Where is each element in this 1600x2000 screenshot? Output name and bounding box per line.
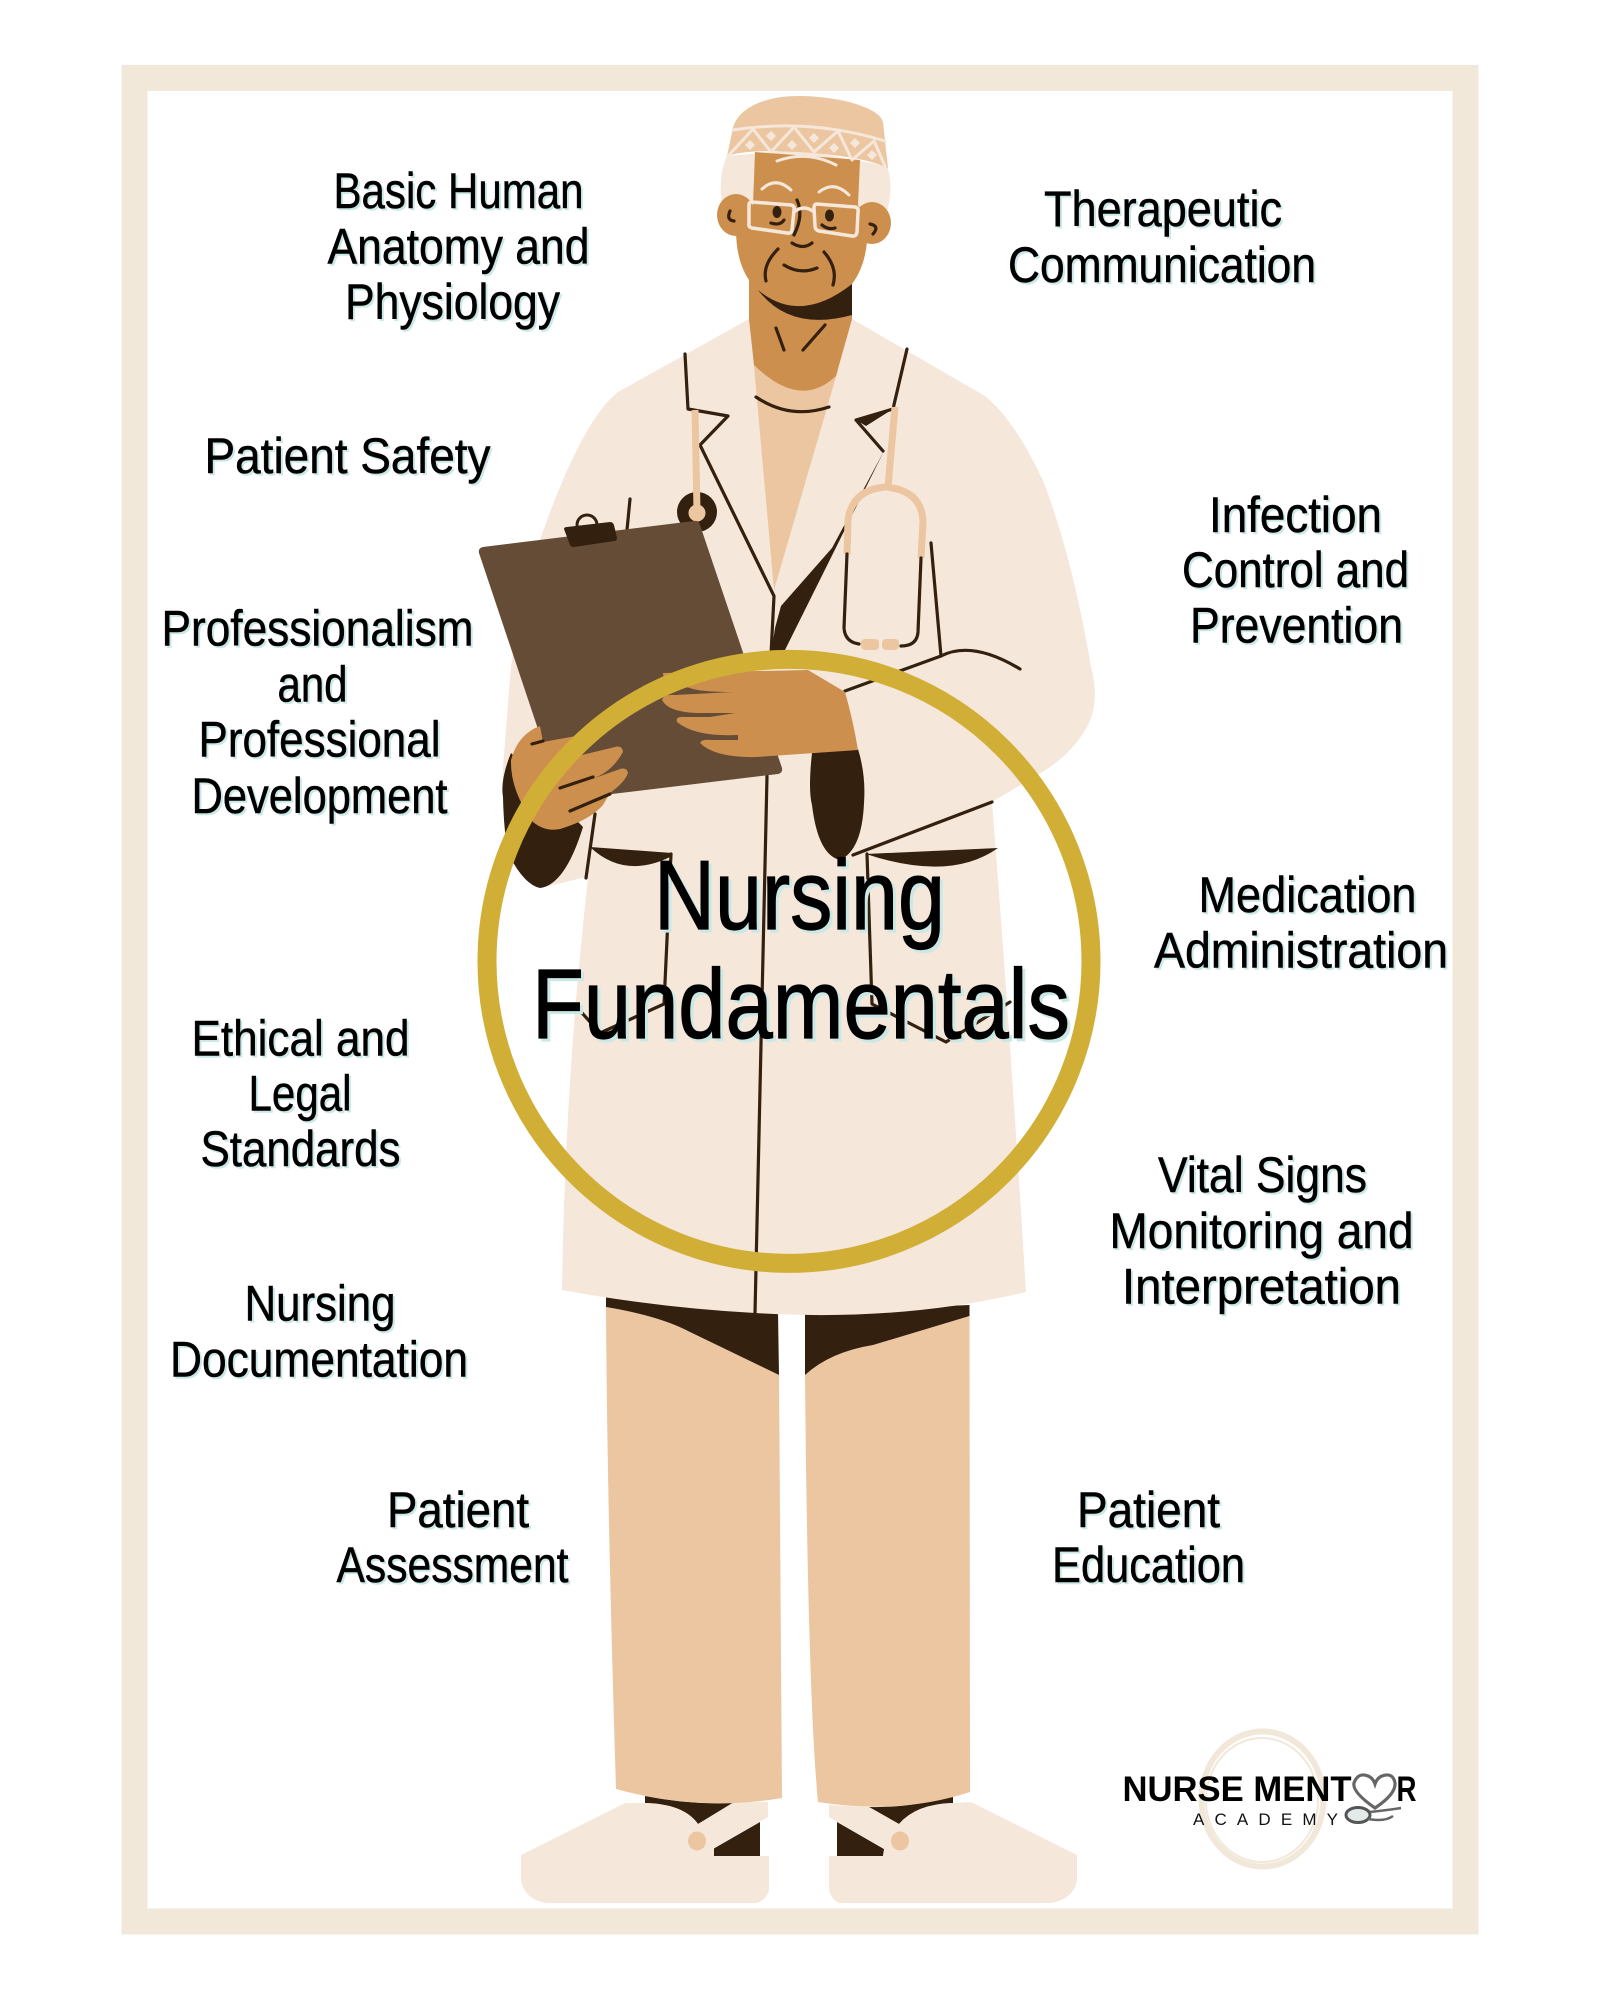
- topic: Vital Signs Monitoring and Interpretation: Monitoring and: [1110, 1203, 1414, 1259]
- topic: Professionalism and Professional Development: Professional: [198, 711, 440, 767]
- pen: [627, 499, 630, 530]
- topic: Therapeutic Communication: [1008, 181, 1316, 293]
- topic: Nursing Documentation: Nursing: [244, 1276, 396, 1332]
- topic: Patient Assessment: [336, 1482, 569, 1593]
- topic: Nursing Documentation: Documentation: [170, 1332, 468, 1388]
- pockets: [574, 802, 1010, 1042]
- topic: Ethical and Legal Standards: Ethical and: [192, 1010, 410, 1066]
- topic: Professionalism and Professional Development: Development: [192, 768, 448, 824]
- topic: Infection Control and Prevention: [1182, 487, 1409, 654]
- topic: Infection Control and Prevention: Prevention: [1190, 598, 1403, 654]
- topic: Basic Human Anatomy and Physiology: Basic Human: [334, 163, 584, 219]
- topic: Infection Control and Prevention: Infection: [1209, 487, 1382, 543]
- topic: Basic Human Anatomy and Physiology: Physiology: [345, 274, 560, 330]
- trousers: [606, 1296, 970, 1807]
- title: Nursing: [654, 840, 945, 950]
- cap: [727, 96, 888, 168]
- topic: Patient Assessment: Assessment: [336, 1537, 569, 1593]
- topic: Ethical and Legal Standards: Standards: [200, 1121, 400, 1177]
- topic: Vital Signs Monitoring and Interpretation: [1110, 1147, 1414, 1315]
- right cuff: [810, 749, 864, 860]
- topic: Ethical and Legal Standards: [192, 1010, 410, 1177]
- topic: Professionalism and Professional Development: and: [278, 656, 348, 712]
- logo: Nurse Mentor Academy: [1122, 1732, 1416, 1866]
- topic: Medication Administration: [1154, 867, 1448, 979]
- topic: Infection Control and Prevention: Control and: [1182, 542, 1409, 598]
- topic: Vital Signs Monitoring and Interpretation: Interpretation: [1122, 1259, 1401, 1315]
- title: [532, 840, 1070, 1059]
- topic: Patient Education: Education: [1052, 1537, 1245, 1593]
- frame border: [134, 78, 1466, 1922]
- logo: Nurse Mentor Academy: ACADEMY: [1193, 1810, 1338, 1829]
- stethoscope: [677, 407, 923, 650]
- clipboard: [479, 515, 782, 794]
- left hand: [511, 726, 628, 830]
- right hand: [662, 670, 858, 757]
- topic: Basic Human Anatomy and Physiology: Anatomy and: [328, 218, 590, 274]
- topic: Therapeutic Communication: Communication: [1008, 237, 1316, 293]
- topic: Medication Administration: Medication: [1198, 867, 1416, 923]
- topic: Professionalism and Professional Development: Professionalism: [162, 601, 474, 657]
- left cuff: [502, 753, 583, 888]
- lab coat: [503, 319, 1095, 1315]
- topic: Nursing Documentation: [170, 1276, 468, 1388]
- logo: Nurse Mentor Academy: R: [1396, 1770, 1416, 1809]
- topic: Patient Assessment: Patient: [387, 1482, 529, 1538]
- topic: Patient Safety: Patient Safety: [204, 428, 490, 484]
- head and neck: [717, 150, 891, 391]
- coat lapels and seams: [685, 349, 1020, 1313]
- gold circle: [487, 659, 1091, 1263]
- shirt: [753, 355, 838, 590]
- topic: Professionalism and Professional Development: [162, 601, 474, 824]
- shoes: [521, 1796, 1077, 1903]
- topic: Ethical and Legal Standards: Legal: [248, 1065, 352, 1121]
- topic: Vital Signs Monitoring and Interpretation: Vital Signs: [1158, 1147, 1367, 1203]
- topic: Patient Education: [1052, 1482, 1245, 1593]
- topic: Patient Education: Patient: [1077, 1482, 1220, 1538]
- topic: Basic Human Anatomy and Physiology: [328, 163, 590, 330]
- topic: Therapeutic Communication: Therapeutic: [1044, 181, 1282, 237]
- topic: Medication Administration: Administration: [1154, 923, 1448, 979]
- logo: Nurse Mentor Academy: NURSE MENT: [1122, 1770, 1352, 1809]
- illustration: nurse figure: [479, 96, 1095, 1903]
- title: Fundamentals: [532, 949, 1070, 1059]
